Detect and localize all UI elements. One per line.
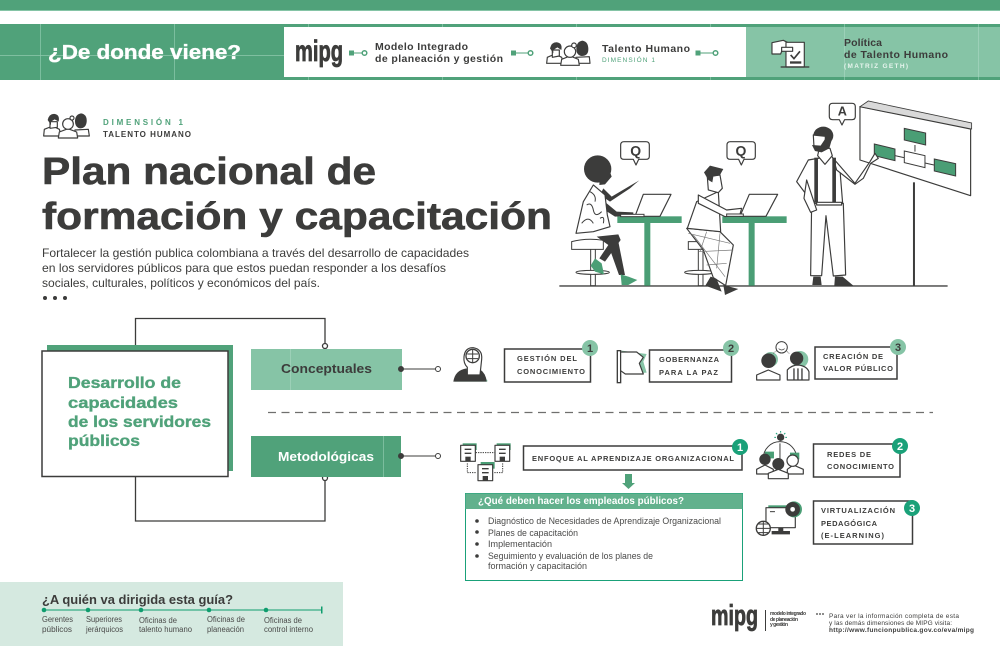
audience labels: jerárquicos xyxy=(85,625,123,634)
icon: policy document xyxy=(772,40,809,68)
category: metodologicas xyxy=(251,436,401,477)
audience labels: planeación xyxy=(207,625,244,634)
icon: knowledge network xyxy=(757,431,803,479)
card: creacion de valor xyxy=(815,339,906,379)
speech bubble Q: Q xyxy=(630,143,641,159)
floor xyxy=(559,285,948,287)
bullet list: Diagnóstico de Necesidades de Aprendizaje Organizacional xyxy=(488,516,721,526)
dimension text: DIMENSIÓN 1 xyxy=(602,55,655,64)
bullet list: Planes de capacitación xyxy=(488,528,578,538)
card: gobernanza: GOBERNANZA xyxy=(659,355,720,364)
panel text: de los servidores xyxy=(68,414,211,431)
footer mipg logo: y gestión xyxy=(770,622,788,628)
person 2 xyxy=(687,166,742,295)
speech bubble Q: Q xyxy=(736,143,747,159)
audience labels: públicos xyxy=(42,625,72,634)
table 2 xyxy=(722,216,787,286)
footer note: y las demás dimensiones de MIPG visita: xyxy=(829,620,952,627)
audience labels: Oficinas de xyxy=(139,616,178,625)
audience heading: ¿A quién va dirigida esta guía? xyxy=(42,592,233,607)
dimension label xyxy=(44,113,191,139)
connector xyxy=(398,366,440,372)
stool 2 xyxy=(685,242,714,286)
category: conceptuales xyxy=(251,349,402,390)
card: gobernanza: PARA LA PAZ xyxy=(659,368,718,377)
intro paragraph: en los servidores públicos para que estos puedan responder a los desafíos xyxy=(42,261,446,275)
panel text xyxy=(68,375,211,450)
card: gestion del conocimiento: 1 xyxy=(587,343,593,355)
audience labels: Gerentes xyxy=(42,615,73,624)
connector xyxy=(398,454,440,458)
card: gobernanza: 2 xyxy=(728,343,734,355)
card: virtualizacion pedagogica: VIRTUALIZACIÓN xyxy=(821,506,895,515)
footer note xyxy=(829,613,974,634)
talent label: TALENTO HUMANO xyxy=(103,130,191,139)
panel text: Desarrollo de xyxy=(68,375,181,392)
intro paragraph xyxy=(42,246,469,290)
speech bubble Q xyxy=(621,142,649,165)
model text xyxy=(375,41,503,65)
footer mipg logo: modelo integrado xyxy=(770,611,806,617)
audience labels: Superiores xyxy=(86,615,122,624)
panel heading: ¿Qué deben hacer los empleados públicos? xyxy=(478,495,684,507)
icon: connected buildings xyxy=(461,443,511,481)
footer note: http://www.funcionpublica.gov.co/eva/mipg xyxy=(829,627,974,634)
arrow down xyxy=(622,474,635,489)
icon: head with brain xyxy=(453,348,487,382)
icon: people creating value xyxy=(757,342,809,380)
audience labels: control interno xyxy=(264,625,314,634)
category: metodologicas: Metodológicas xyxy=(278,449,374,464)
matrix text: (MATRIZ GETH) xyxy=(844,63,908,70)
ellipsis dots xyxy=(43,296,67,300)
card: gestion del conocimiento: CONOCIMIENTO xyxy=(517,367,585,376)
card: enfoque aprendizaje organizacional: 1 xyxy=(737,442,743,454)
connector icon xyxy=(512,51,533,55)
bullet list: formación y capacitación xyxy=(488,561,587,571)
policy text: de Talento Humano xyxy=(844,49,948,61)
card: enfoque aprendizaje organizacional: ENFOQUE AL APRENDIZAJE ORGANIZACIONAL xyxy=(532,454,734,463)
card: enfoque aprendizaje organizacional xyxy=(524,439,748,470)
bullet list xyxy=(475,516,721,571)
laptop 2 xyxy=(740,194,778,216)
table 1 xyxy=(617,216,682,286)
talent text: Talento Humano xyxy=(602,43,690,55)
timeline xyxy=(42,606,322,614)
model text: de planeación y gestión xyxy=(375,53,503,65)
card: creacion de valor: VALOR PÚBLICO xyxy=(823,364,893,373)
connector icon xyxy=(350,51,367,55)
speech bubble A xyxy=(829,103,855,125)
card: creacion de valor: 3 xyxy=(895,342,901,354)
category: conceptuales: Conceptuales xyxy=(281,361,372,376)
header policy panel xyxy=(746,27,1000,77)
icon: people xyxy=(44,113,89,138)
footer note: Para ver la información completa de esta xyxy=(829,613,959,620)
panel: development of capacities xyxy=(42,345,233,476)
audience labels xyxy=(42,615,314,634)
person 3 xyxy=(797,127,878,286)
bullet list: Implementación xyxy=(488,539,552,549)
header title: ¿De donde viene? xyxy=(48,41,241,64)
connector icon xyxy=(696,51,718,55)
card: redes de conocimiento: REDES DE xyxy=(827,450,871,459)
policy text: Política xyxy=(844,37,882,49)
title: formación y capacitación xyxy=(42,196,552,238)
card: creacion de valor: CREACIÓN DE xyxy=(823,352,883,361)
board xyxy=(860,101,972,286)
illustration: office scene xyxy=(559,101,972,295)
card: redes de conocimiento: 2 xyxy=(897,441,903,453)
panel text: públicos xyxy=(68,433,140,450)
model text: Modelo Integrado xyxy=(375,41,468,53)
card: virtualizacion pedagogica: 3 xyxy=(909,503,915,515)
card: virtualizacion pedagogica xyxy=(814,500,920,544)
card: redes de conocimiento: CONOCIMIENTO xyxy=(827,462,894,471)
speech bubble A: A xyxy=(838,105,847,119)
icon: e-learning computer xyxy=(756,501,802,535)
dimension text: DIMENSIÓN 1 xyxy=(103,118,184,127)
panel: target audience xyxy=(0,582,343,646)
audience labels: talento humano xyxy=(139,625,193,634)
title: Plan nacional de xyxy=(42,151,376,193)
card: virtualizacion pedagogica: PEDAGÓGICA xyxy=(821,519,878,528)
card: redes de conocimiento xyxy=(814,438,908,477)
footer mipg logo: de planeación xyxy=(770,617,798,623)
footer mipg logo: mipg xyxy=(711,600,758,632)
footer dots xyxy=(816,613,824,615)
policy text xyxy=(844,37,948,61)
title xyxy=(42,151,552,238)
person 1 xyxy=(576,155,639,285)
bullet list: Seguimiento y evaluación de los planes de xyxy=(488,551,653,561)
connector lines xyxy=(136,318,328,521)
panel: what employees should do xyxy=(466,494,742,580)
stool 1 xyxy=(572,239,609,286)
laptop 1 xyxy=(635,194,671,216)
card: virtualizacion pedagogica: (E-LEARNING) xyxy=(821,531,884,540)
icon: people xyxy=(547,41,590,65)
header band xyxy=(0,24,1000,80)
card: gobernanza xyxy=(650,340,739,382)
audience labels: Oficinas de xyxy=(264,616,303,625)
audience labels: Oficinas de xyxy=(207,615,246,624)
speech bubble Q xyxy=(727,142,755,165)
panel text: capacidades xyxy=(68,395,178,412)
intro paragraph: sociales, culturales, políticos y económicos del país. xyxy=(42,276,320,290)
card: gestion del conocimiento xyxy=(504,340,598,382)
mipg logo: mipg xyxy=(295,35,343,68)
intro paragraph: Fortalecer la gestión publica colombiana a través del desarrollo de capacidades xyxy=(42,246,469,260)
header white panel xyxy=(284,27,746,77)
icon: flag xyxy=(617,351,647,383)
card: gestion del conocimiento: GESTIÓN DEL xyxy=(517,354,577,363)
